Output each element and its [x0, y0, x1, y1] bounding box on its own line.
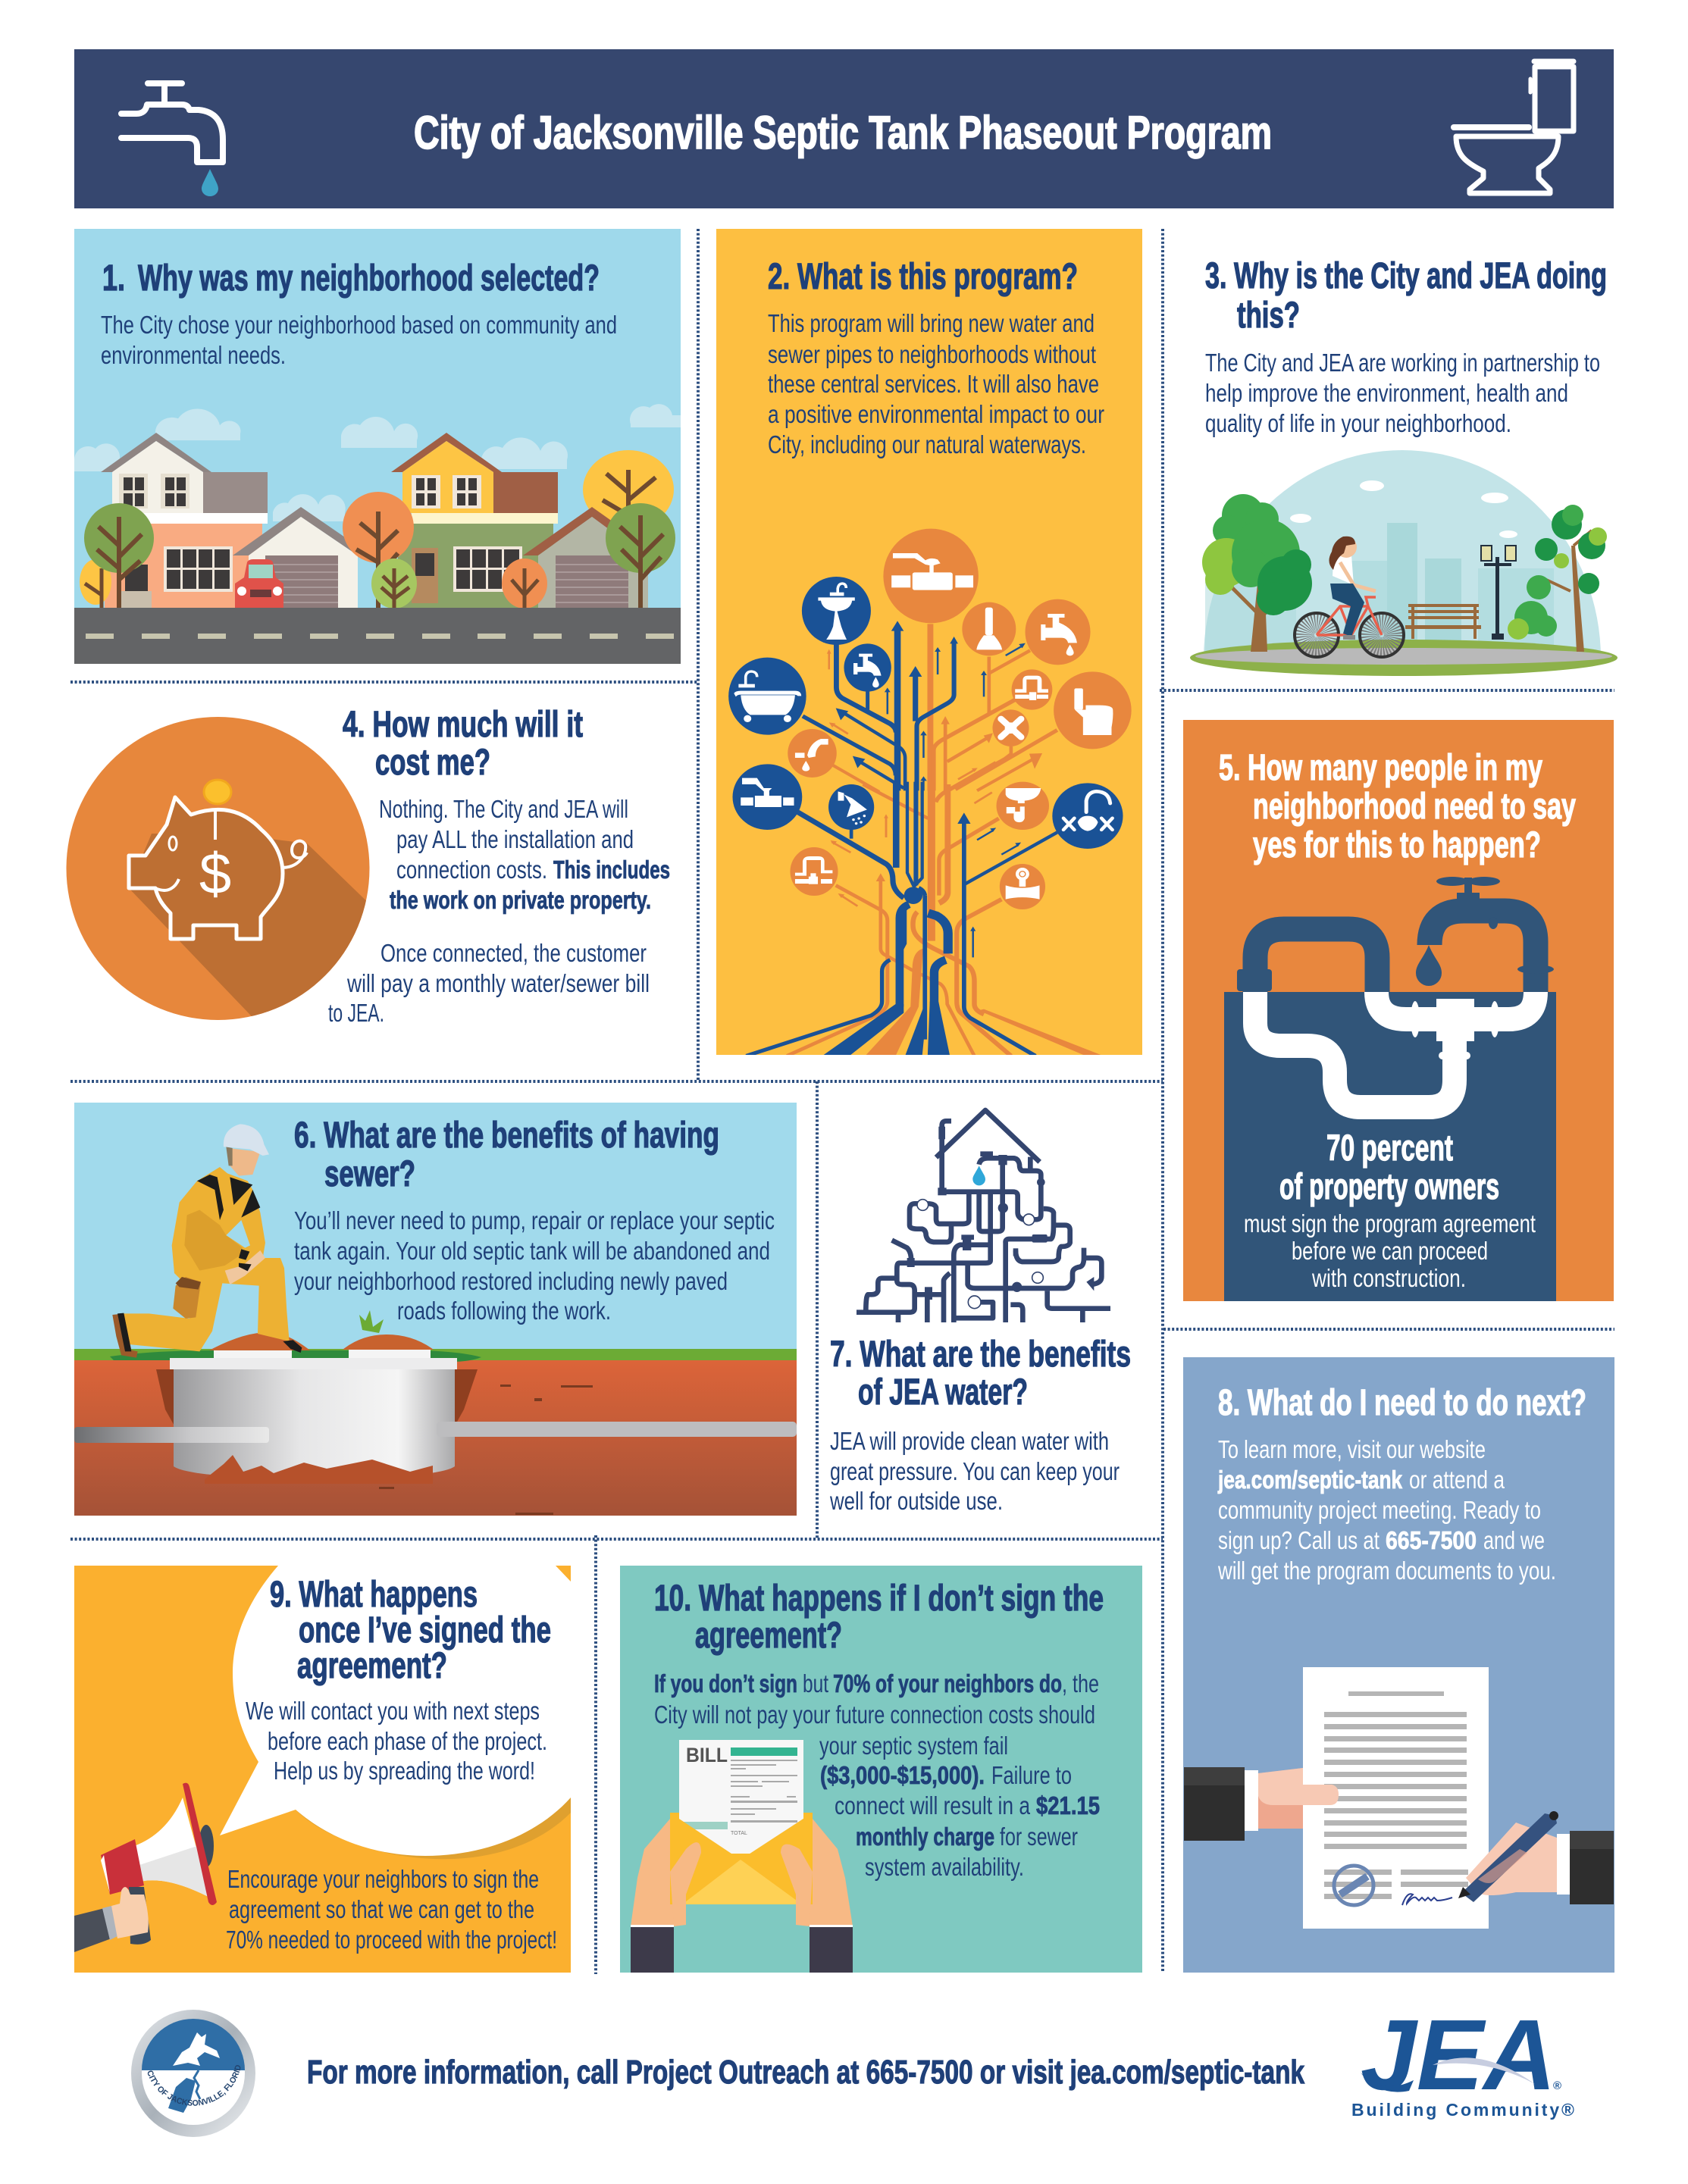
- septic tank: [170, 1310, 457, 1484]
- heading 10: [654, 1579, 1104, 1656]
- trees: [80, 450, 675, 609]
- body text 10: Failure to: [991, 1761, 1072, 1789]
- body text 2: a positive environmental impact to our: [768, 400, 1104, 428]
- icon: piggy bank circle: [67, 717, 379, 1031]
- body text 9: We will contact you with next steps: [246, 1697, 540, 1725]
- garage right: [523, 507, 652, 608]
- body text 1: The City chose your neighborhood based on community and: [101, 311, 617, 339]
- body text 10: City will not pay your future connection costs should: [654, 1701, 1095, 1729]
- body text 10: ($3,000-$15,000).: [820, 1761, 985, 1789]
- heading 1: 1.: [102, 258, 125, 299]
- garage left: [233, 507, 371, 608]
- JEA logo: Building Community®: [1351, 2100, 1574, 2120]
- heading 1: [102, 258, 600, 299]
- body text 3: quality of life in your neighborhood.: [1205, 409, 1511, 437]
- body text 2: This program will bring new water and: [768, 309, 1095, 337]
- panel 4: how much will it cost me: [67, 705, 670, 1031]
- heading 3: this?: [1237, 296, 1300, 336]
- heading 3: [1205, 256, 1607, 336]
- body text 1: environmental needs.: [101, 341, 286, 369]
- illustration: bill in envelope: BILL: [686, 1744, 728, 1766]
- heading 9: agreement?: [297, 1646, 447, 1686]
- panel 10: what happens if I don't sign: [620, 1566, 1142, 1973]
- body text 10: system availability.: [865, 1853, 1024, 1881]
- body text 7: JEA will provide clean water with: [830, 1427, 1109, 1455]
- heading 10: 10. What happens if I don’t sign the: [654, 1579, 1104, 1619]
- header banner: [74, 49, 1614, 208]
- ground and soil: [74, 1349, 797, 1516]
- panel 5: how many people need to say yes: [1183, 720, 1614, 1301]
- illustration: signing document: [1184, 1667, 1614, 1929]
- body text 8: and we: [1483, 1526, 1545, 1554]
- body text 4: [328, 795, 670, 1027]
- body text 7: well for outside use.: [829, 1487, 1003, 1515]
- body text 6: roads following the work.: [397, 1297, 611, 1325]
- body text 4: This includes: [553, 856, 670, 884]
- body text 1: [101, 311, 617, 369]
- lamp post: [1481, 546, 1516, 640]
- body text 10: 70% of your neighbors do: [833, 1669, 1062, 1697]
- body text 3: help improve the environment, health and: [1205, 379, 1568, 407]
- heading 9: 9. What happens: [270, 1575, 478, 1615]
- illustration: pipe tree: [728, 529, 1132, 1056]
- icon: piggy bank circle: $: [199, 842, 231, 906]
- panel 9: what happens once I've signed: [74, 1566, 571, 1973]
- panel 6: benefits of having sewer: [74, 1103, 797, 1516]
- icon: house of pipes: [857, 1110, 1110, 1322]
- heading 7: [830, 1334, 1131, 1413]
- body text 3: [1205, 349, 1600, 437]
- bench: [1405, 604, 1481, 639]
- pipe tree icons: [728, 529, 1132, 778]
- body text 8: will get the program documents to you.: [1217, 1557, 1556, 1585]
- body text 8: [1217, 1435, 1556, 1585]
- body text 4: connection costs.: [396, 856, 547, 884]
- body text 7: great pressure. You can keep your: [830, 1457, 1120, 1485]
- body text 10: $21.15: [1036, 1791, 1100, 1819]
- body text 6: You’ll never need to pump, repair or replace your septic: [294, 1206, 775, 1234]
- body text 8: community project meeting. Ready to: [1218, 1496, 1541, 1524]
- body text 8: To learn more, visit our website: [1218, 1435, 1486, 1463]
- body text 10: , the: [1062, 1669, 1099, 1697]
- upper pipes and arrows: [803, 621, 1057, 792]
- icon: faucet: [121, 83, 223, 196]
- panel 1: why was my neighborhood selected: [74, 229, 681, 664]
- panel 3: why is the city and JEA doing this: [1190, 261, 1618, 676]
- panel 8: what do I need to do next: [1183, 1357, 1614, 1973]
- body text 8: jea.com/septic-tank: [1217, 1466, 1403, 1494]
- body text 10: connect will result in a: [835, 1791, 1031, 1819]
- callout: 70 percent: 70 percent: [1326, 1128, 1453, 1169]
- body text 9: 70% needed to proceed with the project!: [226, 1926, 557, 1954]
- city of Jacksonville seal: CITY OF JACKSONVILLE, FLORIDA: [147, 2065, 241, 2106]
- body text 2: these central services. It will also have: [768, 370, 1099, 398]
- body text 10: but: [803, 1669, 828, 1697]
- body text 4: the work on private property.: [390, 886, 651, 914]
- body text 6: [294, 1206, 775, 1325]
- left hand: [1184, 1767, 1339, 1841]
- body text 2: City, including our natural waterways.: [768, 430, 1086, 458]
- car: [235, 559, 283, 608]
- trees: [1202, 494, 1607, 652]
- city of Jacksonville seal: [131, 2010, 255, 2137]
- callout: 70 percent: of property owners: [1279, 1167, 1499, 1207]
- heading 2: 2. What is this program?: [768, 257, 1078, 297]
- heading 6: sewer?: [324, 1154, 415, 1194]
- heading 1: Why was my neighborhood selected?: [138, 258, 600, 299]
- speech bubble: [220, 1566, 571, 1859]
- JEA logo: ®: [1553, 2079, 1561, 2092]
- illustration: neighborhood: [74, 404, 681, 664]
- heading 9: once I’ve signed the: [299, 1610, 551, 1651]
- heading 6: 6. What are the benefits of having: [294, 1115, 719, 1156]
- callout: 70 percent: [1244, 1128, 1536, 1292]
- right hand and pen: [1458, 1811, 1614, 1904]
- body text 8: sign up? Call us at: [1218, 1526, 1380, 1554]
- icon: toilet: [1454, 61, 1574, 193]
- body text 4: to JEA.: [328, 999, 384, 1027]
- body text 10: monthly charge: [856, 1823, 994, 1851]
- heading 4: [343, 705, 583, 783]
- body text 6: your neighborhood restored including newly paved: [294, 1267, 728, 1295]
- body text 8: or attend a: [1409, 1466, 1505, 1494]
- panel 7: benefits of JEA water: [829, 1110, 1131, 1515]
- icon: megaphone and hand: [74, 1783, 217, 1952]
- body text 9: agreement so that we can get to the: [229, 1895, 534, 1923]
- illustration: bill in envelope: TOTAL: [731, 1831, 747, 1836]
- heading 4: 4. How much will it: [343, 705, 583, 745]
- body text 10: your septic system fail: [819, 1732, 1008, 1760]
- heading 9: [270, 1575, 551, 1686]
- dotted dividers: [70, 229, 1614, 1974]
- body text 9: Help us by spreading the word!: [274, 1757, 535, 1785]
- house right: [391, 433, 558, 608]
- body text 2: sewer pipes to neighborhoods without: [768, 340, 1096, 368]
- illustration: park with cyclist: [1190, 450, 1618, 676]
- body text 4: Once connected, the customer: [381, 939, 647, 967]
- body text 9: Encourage your neighbors to sign the: [227, 1865, 539, 1893]
- illustration: bill in envelope: [631, 1740, 853, 1973]
- heading 5: yes for this to happen?: [1253, 825, 1541, 865]
- panel 2: what is this program: [716, 229, 1142, 1056]
- callout: 70 percent: with construction.: [1311, 1264, 1466, 1292]
- body text 7: [829, 1427, 1120, 1515]
- body text 4: pay ALL the installation and: [396, 825, 634, 853]
- body text 10: for sewer: [1000, 1823, 1078, 1851]
- heading 7: of JEA water?: [858, 1372, 1028, 1413]
- heading 7: 7. What are the benefits: [830, 1334, 1131, 1375]
- body text 8: 665-7500: [1386, 1526, 1477, 1554]
- heading 10: agreement?: [695, 1616, 842, 1656]
- illustration: pipes and faucet: [1237, 877, 1554, 1107]
- house left: [101, 433, 268, 608]
- body text 9: [226, 1697, 557, 1954]
- cyclist: [1295, 537, 1404, 657]
- footer contact line: For more information, call Project Outreach at 665-7500 or visit jea.com/septic-tank: [307, 2054, 1304, 2091]
- heading 5: [1219, 748, 1576, 865]
- pipes: [74, 1422, 797, 1443]
- road: [74, 608, 681, 664]
- lower pipes and fan: [746, 763, 1104, 1056]
- body text 2: [768, 309, 1104, 458]
- JEA logo: JEA: [1361, 1999, 1556, 2110]
- body text 4: will pay a monthly water/sewer bill: [346, 969, 650, 997]
- callout: 70 percent: before we can proceed: [1292, 1237, 1488, 1265]
- title: City of Jacksonville Septic Tank Phaseout Program: [414, 107, 1272, 158]
- body text 9: before each phase of the project.: [268, 1727, 547, 1755]
- heading 6: [294, 1115, 719, 1194]
- callout: 70 percent: must sign the program agreement: [1244, 1209, 1536, 1237]
- body text 4: Nothing. The City and JEA will: [379, 795, 628, 823]
- body text 10: [654, 1669, 1100, 1881]
- heading 5: 5. How many people in my: [1219, 748, 1542, 788]
- heading 4: cost me?: [375, 743, 490, 783]
- body text 10: If you don’t sign: [654, 1669, 797, 1697]
- worker: [112, 1124, 302, 1358]
- body text 6: tank again. Your old septic tank will be abandoned and: [294, 1237, 770, 1265]
